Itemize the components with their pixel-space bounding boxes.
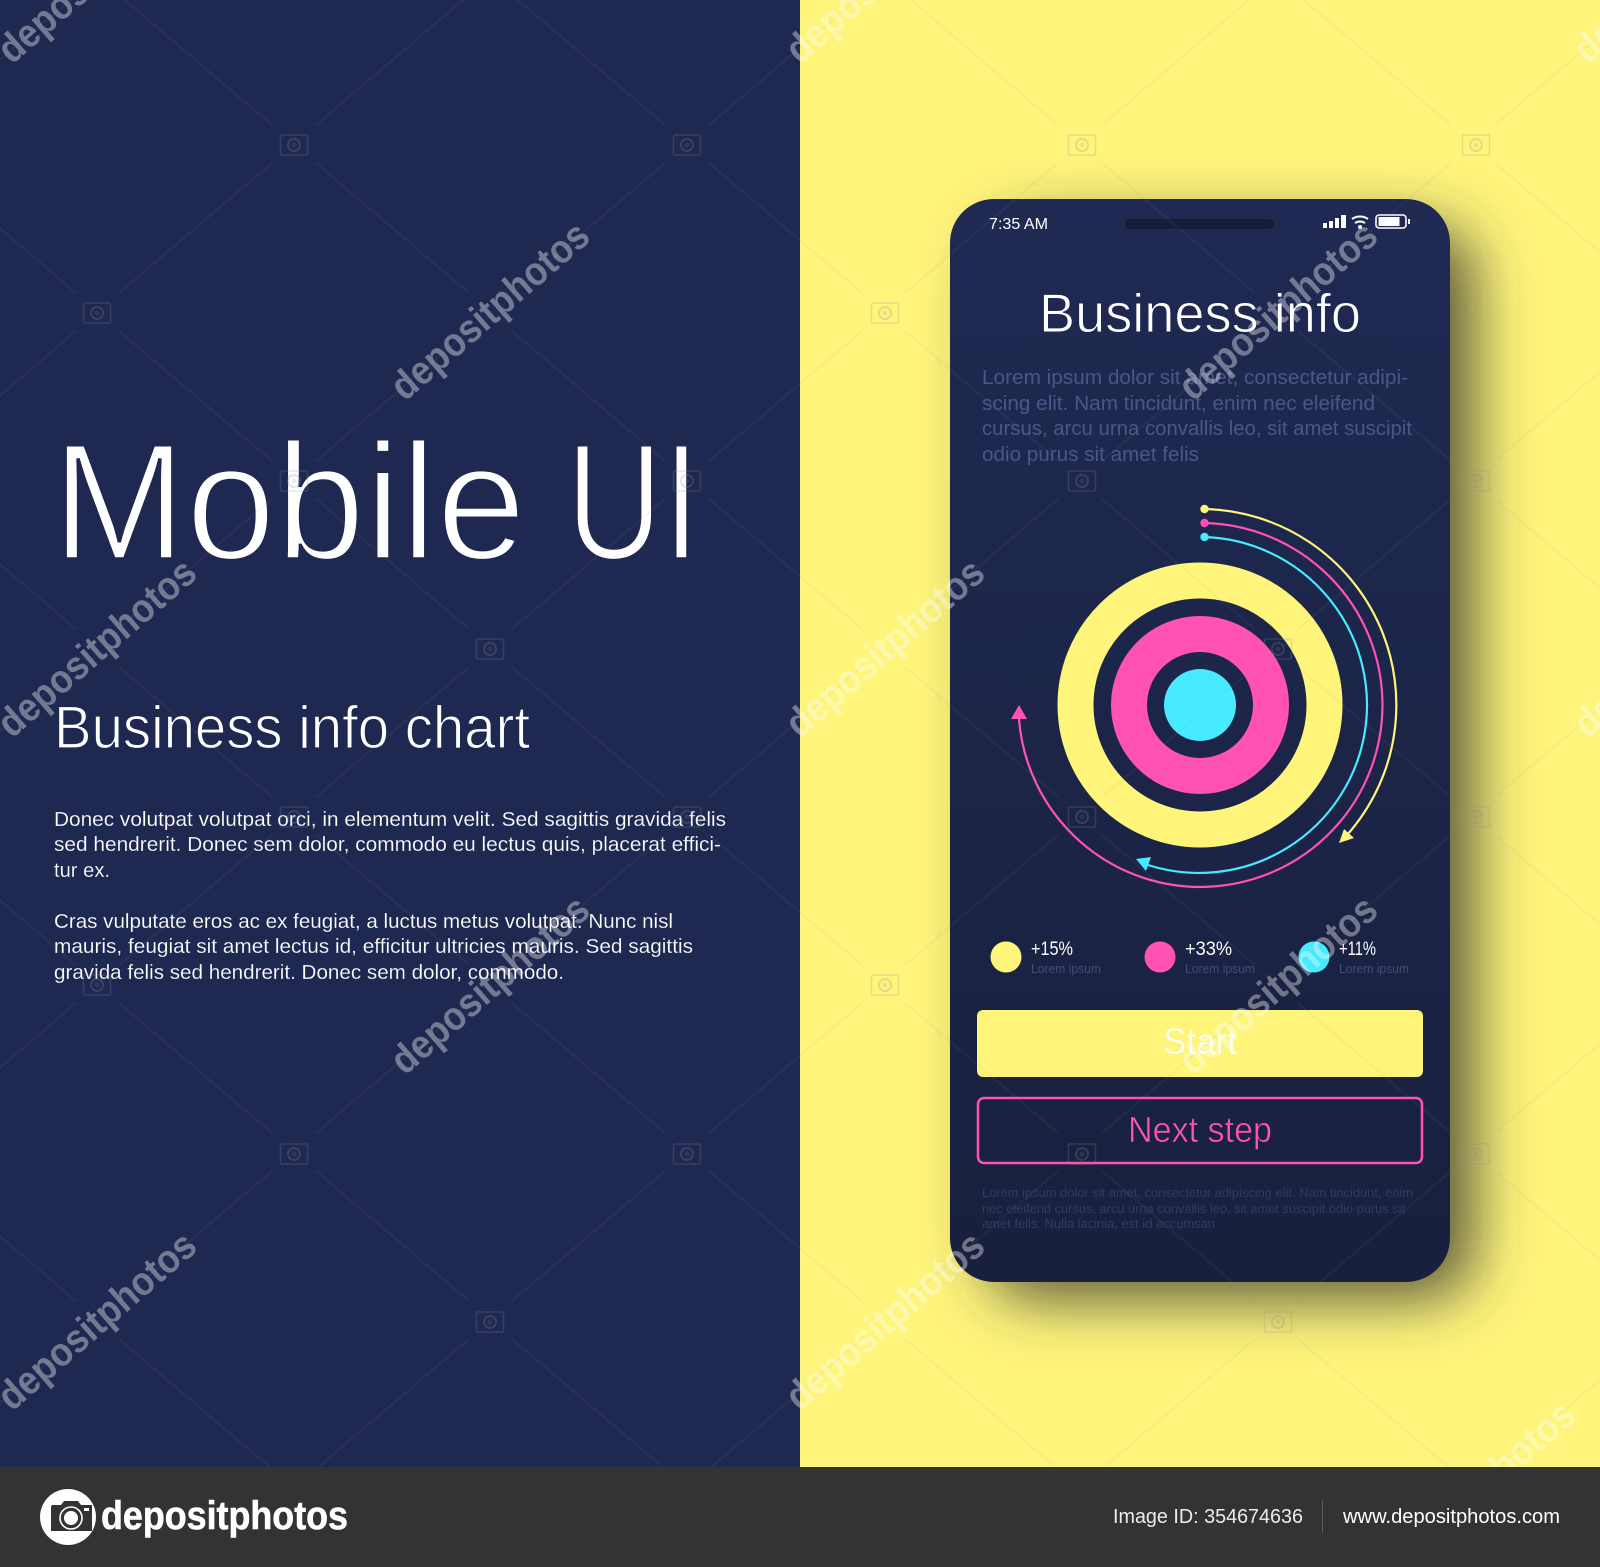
text block: second paragraph: Cras vulputate eros ac ex feugiat, a luctus metus volutpat. Nunc nisl: [54, 910, 673, 933]
phone heading: Business info: Business info: [1039, 282, 1361, 344]
watermark: diagonal depositphotos text: depositphotos: [382, 887, 598, 1083]
watermark: diagonal depositphotos text: depositphotos: [382, 213, 598, 409]
phone intro text: [982, 367, 1412, 466]
watermark: diagonal depositphotos text: depositphotos: [777, 550, 993, 746]
button: Next step: [978, 1098, 1422, 1163]
phone fine print: Lorem ipsum dolor sit amet, consectetur adipiscing elit. Nam tincidunt, enim: [982, 1186, 1413, 1200]
status bar: time: 7:35 AM: [989, 216, 1048, 233]
phone mockup: [950, 199, 1450, 1282]
arrow: yellow arc: [1200, 505, 1396, 843]
legend item: +11%: [1298, 939, 1409, 976]
button: Start: Start: [1163, 1021, 1238, 1062]
legend item: +11%: Lorem ipsum: [1339, 962, 1409, 976]
chart: concentric rings: [1076, 580, 1324, 830]
disc: cyan: [1164, 669, 1236, 741]
phone intro text: Lorem ipsum dolor sit amet, consectetur adipi-: [982, 367, 1408, 389]
icon: depositphotos camera logo: [40, 1489, 96, 1545]
logo wordmark: depositphotos: [101, 1494, 348, 1538]
text block: first paragraph: tur ex.: [54, 859, 110, 882]
button: Next step: Next step: [1128, 1109, 1272, 1150]
legend item: +15%: [990, 939, 1101, 976]
panel: navy left background: [0, 0, 800, 1467]
text block: first paragraph: Donec volutpat volutpat orci, in elementum velit. Sed sagittis gravida felis: [54, 808, 726, 831]
watermark: diagonal depositphotos text: depositphotos: [1170, 213, 1386, 409]
phone intro text: scing elit. Nam tincidunt, enim nec eleifend: [982, 393, 1375, 415]
icon: signal bars: [1323, 215, 1346, 228]
watermark: diagonal depositphotos text: depositphotos: [1170, 887, 1386, 1083]
watermark: camera marks: [84, 135, 1490, 1332]
button: Start: [977, 1010, 1423, 1077]
phone fine print: amet felis. Nulla lacinia, est id accumsan: [982, 1217, 1215, 1231]
legend item: +33%: +33%: [1185, 939, 1232, 960]
heading: Business info chart: Business info chart: [54, 694, 530, 761]
ring: pink: [1129, 634, 1271, 776]
icon: wifi: [1352, 216, 1368, 228]
phone intro text: odio purus sit amet felis: [982, 444, 1199, 466]
text block: first paragraph: sed hendrerit. Donec sem dolor, commodo eu lectus quis, placerat effici-: [54, 833, 721, 856]
legend item: +15%: Lorem ipsum: [1031, 962, 1101, 976]
phone fine print: [982, 1186, 1413, 1231]
phone drop shadow: [985, 225, 1475, 1300]
legend item: +11%: +11%: [1339, 939, 1376, 960]
legend item: +15%: +15%: [1031, 939, 1073, 960]
website url: www.depositphotos.com: [1342, 1506, 1560, 1528]
legend item: +33%: [1144, 939, 1255, 976]
phone body: [950, 199, 1450, 1282]
icon: battery: [1376, 215, 1410, 228]
arrow: cyan arc: [1136, 533, 1367, 873]
image id: Image ID: 354674636: [1113, 1506, 1303, 1528]
text block: second paragraph: gravida felis sed hendrerit. Donec sem dolor, commodo.: [54, 961, 564, 984]
text block: first paragraph: [54, 808, 726, 882]
arrow: pink arc: [1011, 519, 1382, 887]
title: Mobile UI: Mobile: [52, 410, 526, 595]
ring: yellow: [1076, 580, 1324, 830]
title: Mobile UI: UI: [566, 410, 700, 595]
legend item: +33%: Lorem ipsum: [1185, 962, 1255, 976]
footer bar: [0, 1467, 1600, 1567]
text block: second paragraph: [54, 910, 693, 984]
status bar: notch: [1125, 219, 1274, 229]
phone intro text: cursus, arcu urna convallis leo, sit amet suscipit: [982, 418, 1412, 440]
phone fine print: nec eleifend cursus, arcu urna convallis leo, sit amet suscipit odio purus sit: [982, 1202, 1406, 1216]
panel: yellow right background: [800, 0, 1600, 1467]
watermark: diagonal depositphotos text: depositphotos: [777, 1223, 993, 1419]
text block: second paragraph: mauris, feugiat sit amet lectus id, efficitur ultricies mauris. Sed sagittis: [54, 935, 693, 958]
